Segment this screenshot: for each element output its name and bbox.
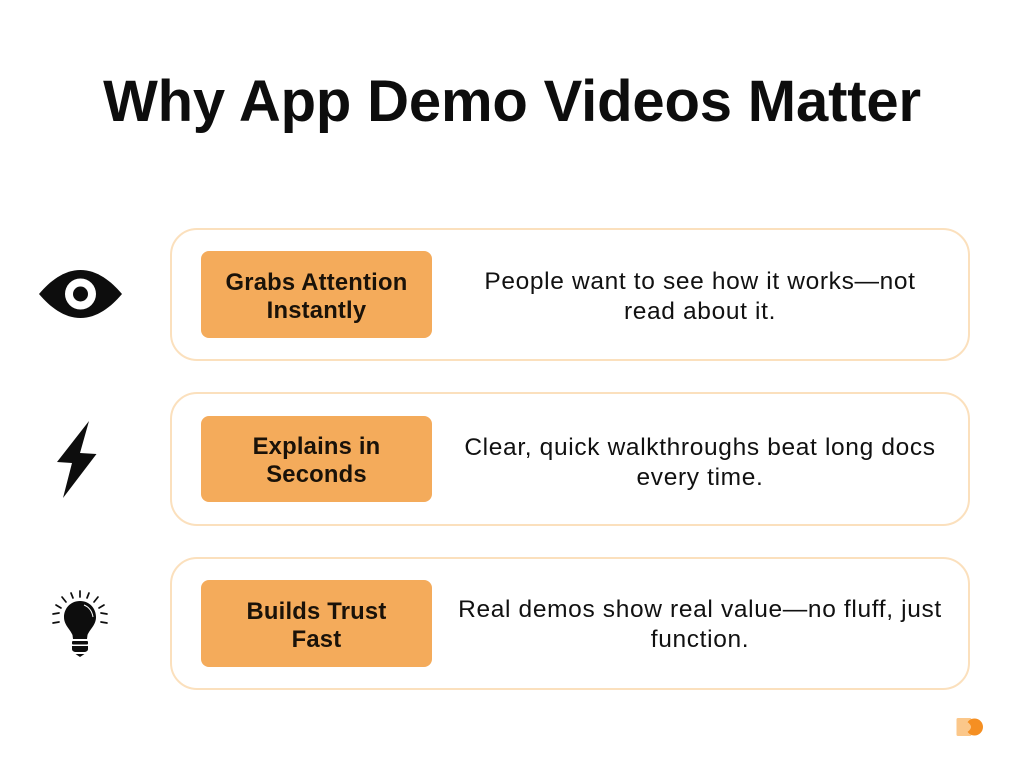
text: builds trust description: function.	[651, 626, 749, 653]
panel: builds trust card	[170, 557, 970, 690]
label: explains in seconds	[201, 416, 432, 502]
icon: light bulb	[52, 590, 108, 657]
icon: brand logo	[956, 718, 983, 736]
label: builds trust fast: Fast	[292, 626, 341, 652]
icon: eye	[39, 270, 122, 318]
label: grabs attention instantly: Grabs Attention	[226, 268, 407, 296]
panel: grabs attention card	[170, 228, 970, 361]
label: explains in seconds: Explains in	[253, 433, 380, 460]
text: grabs attention description: People want to see how it works—not	[484, 268, 916, 295]
label: grabs attention instantly: Instantly	[267, 296, 366, 324]
label: grabs attention instantly	[201, 251, 432, 338]
icon: lightning bolt	[57, 421, 96, 498]
text: explains in seconds description: Clear, quick walkthroughs beat long docs	[464, 434, 936, 461]
panel: explains in seconds card	[170, 392, 970, 526]
text: grabs attention description: read about it.	[624, 298, 776, 325]
title: Why App Demo Videos Matter	[103, 69, 921, 134]
text: builds trust description	[458, 596, 942, 653]
label: builds trust fast: Builds Trust	[247, 598, 386, 624]
label: builds trust fast	[201, 580, 432, 667]
text: builds trust description: Real demos show real value—no fluff, just	[458, 596, 942, 623]
text: explains in seconds description: every time.	[637, 464, 763, 491]
label: explains in seconds: Seconds	[266, 461, 367, 488]
text: explains in seconds description	[464, 434, 936, 491]
text: grabs attention description	[484, 268, 916, 325]
